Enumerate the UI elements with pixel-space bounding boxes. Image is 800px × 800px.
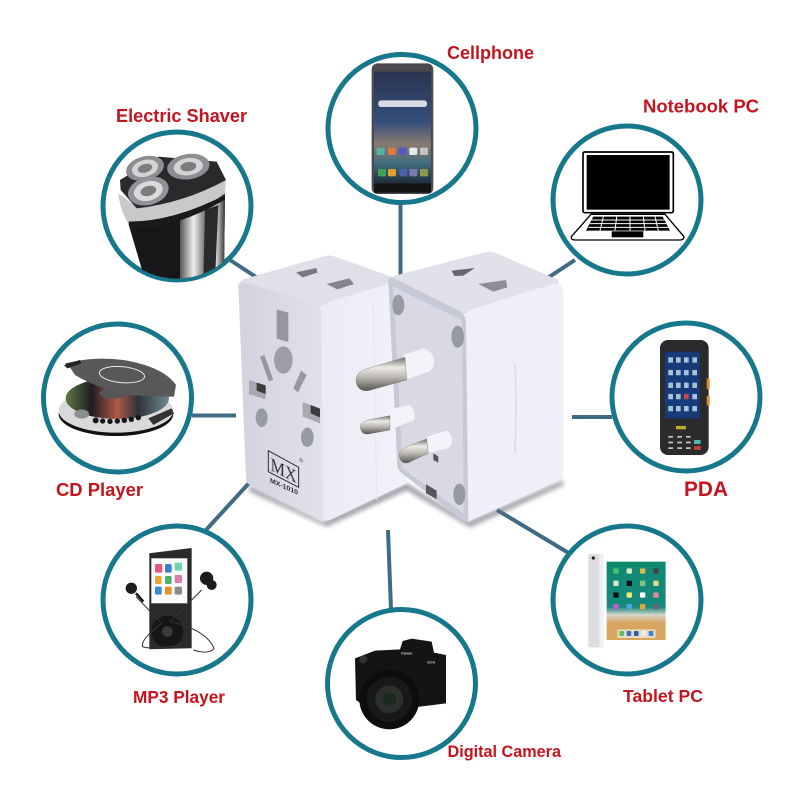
- label: Electric Shaver: [116, 106, 247, 126]
- icon: camera: EOS: [427, 660, 436, 664]
- icon: phone: [372, 63, 433, 194]
- panel: pda: [612, 323, 760, 501]
- left block: [238, 255, 407, 522]
- plug face: [388, 278, 468, 521]
- label: Notebook PC: [643, 96, 759, 116]
- icon: tablet: [588, 554, 666, 647]
- pins: [356, 357, 428, 463]
- connector lines: [192, 204, 612, 610]
- logo: MX: ®: [299, 457, 304, 466]
- label: Digital Camera: [448, 743, 562, 761]
- top slots: [296, 268, 317, 277]
- side face: [322, 283, 407, 521]
- top slots: [452, 268, 475, 276]
- panel: tablet pc: [553, 526, 703, 706]
- label: MP3 Player: [133, 687, 225, 707]
- label: Tablet PC: [623, 686, 703, 706]
- icon: pda device: [660, 340, 710, 455]
- face holes: [392, 295, 404, 315]
- panel: cellphone: [328, 43, 534, 202]
- panel: electric shaver: [103, 106, 251, 280]
- circle ring: [44, 324, 192, 472]
- icon: camera: Canon: [401, 651, 412, 655]
- label: PDA: [684, 478, 728, 501]
- pin stems: [388, 348, 452, 453]
- logo: MX: MX-1010: [270, 478, 298, 497]
- logo: MX: MX: [271, 454, 297, 488]
- socket holes: [277, 309, 288, 342]
- socket face: [238, 282, 323, 522]
- circle ring: [612, 323, 760, 471]
- label: Cellphone: [447, 43, 534, 63]
- panel: cd player: [44, 324, 192, 500]
- panel: mp3 player: [103, 526, 251, 707]
- circle ring: [553, 126, 701, 274]
- top face: [392, 252, 559, 314]
- circle ring: [328, 610, 476, 758]
- circle ring: [103, 132, 251, 280]
- shadow: [248, 480, 563, 527]
- side face: [465, 283, 563, 522]
- label: CD Player: [56, 479, 143, 500]
- circle ring: [103, 526, 251, 674]
- panel: digital camera: [328, 610, 562, 761]
- icon: laptop: [571, 152, 684, 240]
- circle ring: [328, 54, 476, 202]
- top face: [240, 255, 393, 307]
- adapter product: [238, 252, 563, 527]
- icon: mp3 player: [126, 548, 217, 652]
- logo: MX: [268, 451, 304, 497]
- icon: camera: [355, 639, 446, 729]
- icon: shaver: [118, 151, 226, 280]
- right block: [388, 252, 563, 522]
- icon: cd player: [59, 359, 176, 436]
- circle ring: [553, 526, 701, 674]
- panel: notebook pc: [553, 96, 759, 274]
